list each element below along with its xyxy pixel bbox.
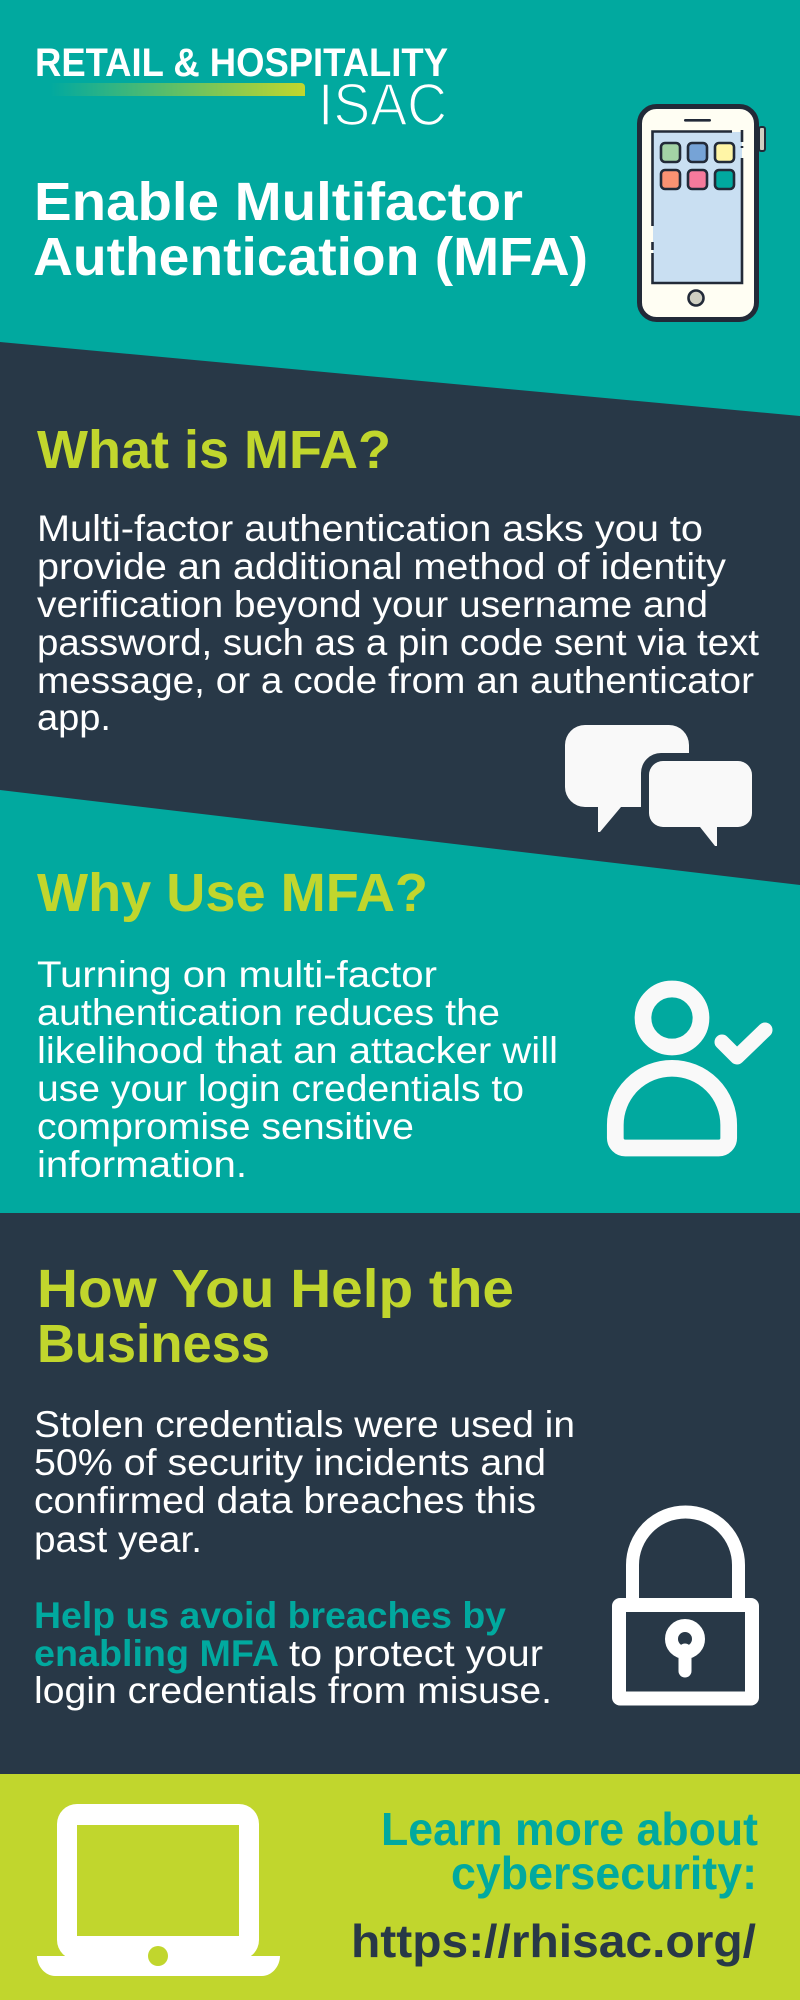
heading: How You Help the Business: How You Help the: [37, 1259, 514, 1319]
footer call to action: [351, 1803, 758, 1967]
panel: header background: [0, 0, 800, 420]
title: Authentication (MFA): [33, 227, 588, 287]
text block: what is MFA body: provide an additional method of identity: [37, 546, 727, 587]
footer call to action: https://rhisac.org/: [351, 1915, 756, 1967]
text block: stolen credentials statistic: confirmed data breaches this: [34, 1480, 536, 1521]
text block: call to action: [34, 1595, 552, 1711]
text block: why use MFA body: compromise sensitive: [37, 1106, 414, 1147]
text block: why use MFA body: authentication reduces the: [37, 992, 500, 1033]
icon: smartphone: [640, 106, 765, 320]
text block: why use MFA body: [37, 954, 558, 1185]
logo: Retail & Hospitality ISAC: [35, 41, 448, 138]
heading: Why Use MFA?: Why Use MFA?: [37, 863, 428, 923]
panel: what is MFA background: [0, 342, 800, 890]
heading: How You Help the Business: Business: [37, 1314, 270, 1374]
logo wordmark: RETAIL & HOSPITALITY: [35, 41, 448, 85]
panel: footer background: [0, 1774, 800, 2000]
logo gradient bar: [50, 83, 305, 96]
text block: stolen credentials statistic: [34, 1404, 575, 1560]
icon: padlock: [619, 1512, 752, 1698]
panel: how you help the business background: [0, 1213, 800, 1774]
text block: stolen credentials statistic: Stolen credentials were used in: [34, 1404, 575, 1445]
icon: user with check mark: [615, 989, 765, 1148]
text block: call to action: enabling MFA: [34, 1633, 279, 1674]
text block: what is MFA body: password, such as a pin code sent via text: [37, 622, 760, 663]
title: [33, 172, 588, 287]
heading: What is MFA?: What is MFA?: [37, 420, 391, 480]
text block: what is MFA body: Multi-factor authentication asks you to: [37, 508, 703, 549]
text block: why use MFA body: Turning on multi-factor: [37, 954, 437, 995]
text block: what is MFA body: app.: [37, 697, 111, 738]
text block: stolen credentials statistic: 50% of security incidents and: [34, 1442, 546, 1483]
text block: call to action: to protect your: [289, 1633, 543, 1674]
panel: why use MFA background: [0, 790, 800, 1213]
text block: why use MFA body: likelihood that an attacker will: [37, 1030, 558, 1071]
text block: call to action: Help us avoid breaches by: [34, 1595, 506, 1636]
logo ISAC: ISAC: [318, 72, 447, 138]
icon: chat bubbles: [565, 725, 752, 846]
text block: what is MFA body: message, or a code from an authenticator: [37, 660, 754, 701]
text block: why use MFA body: information.: [37, 1144, 247, 1185]
text block: why use MFA body: use your login credentials to: [37, 1068, 524, 1109]
heading: How You Help the Business: [37, 1259, 514, 1374]
text block: what is MFA body: verification beyond your username and: [37, 584, 708, 625]
footer call to action: cybersecurity:: [451, 1847, 757, 1899]
footer call to action: Learn more about: [381, 1803, 758, 1855]
text block: stolen credentials statistic: past year.: [34, 1519, 202, 1560]
title: Enable Multifactor: [34, 172, 523, 232]
text block: what is MFA body: [37, 508, 760, 738]
text block: call to action: login credentials from misuse.: [34, 1670, 552, 1711]
icon: laptop: [37, 1804, 280, 1976]
